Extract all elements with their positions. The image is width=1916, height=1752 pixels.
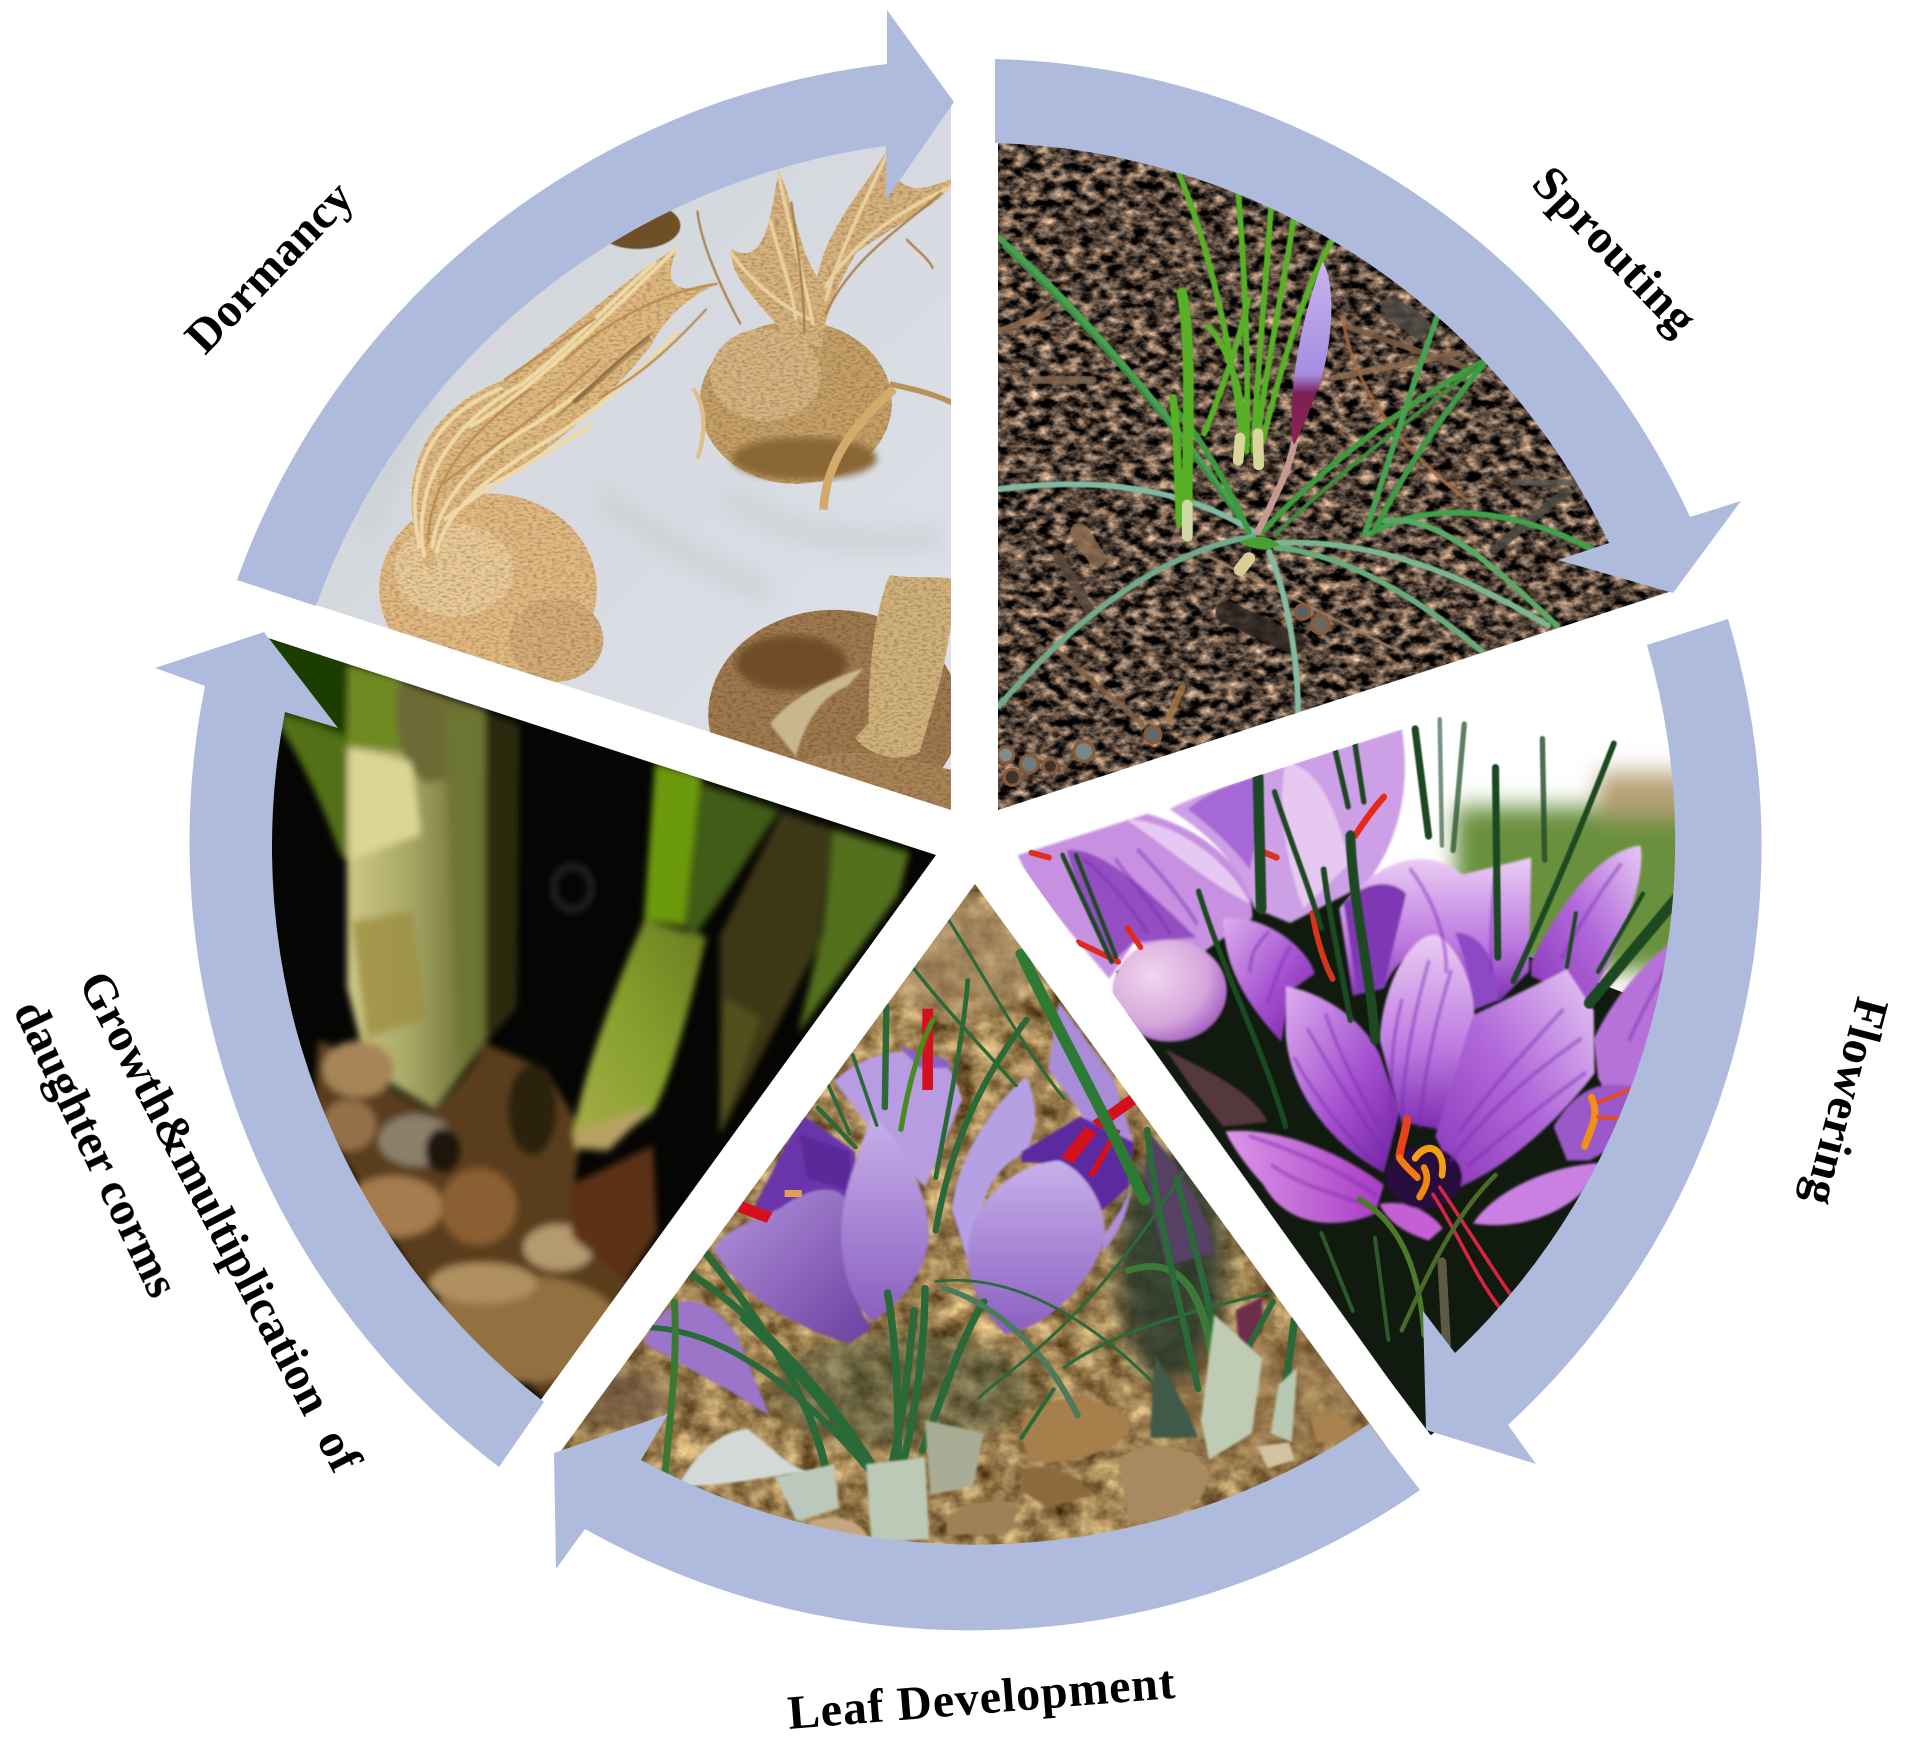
corm: upper right with tuft <box>693 151 952 510</box>
faint watermark ring <box>554 866 591 909</box>
sheaths at leaf bases <box>1187 434 1259 570</box>
arrow: flowering <box>1423 619 1762 1464</box>
label: Flowering: Flowering <box>1794 992 1899 1211</box>
arrow: sprouting <box>995 59 1741 593</box>
upper green leaves of second stem <box>644 763 702 926</box>
back flowers <box>644 1002 1262 1416</box>
label: Leaf Development: Leaf Development <box>786 1656 1177 1740</box>
corm: lower left with long roots <box>379 247 717 684</box>
leaves: long arching <box>998 237 1593 713</box>
green leaves <box>652 921 1295 1486</box>
corm: dark top corm <box>610 210 682 250</box>
panel: flowering photo <box>1017 716 1676 1436</box>
blurred field background <box>1455 773 1705 971</box>
label: Growth and multiplication of daughter corms: daughter corms <box>3 992 190 1305</box>
stamens and stigma <box>1031 797 1634 1311</box>
arrow: dormancy <box>237 10 954 606</box>
stem: second angled stem <box>572 921 706 1151</box>
white leaf sheaths <box>679 1315 1297 1543</box>
soil clods <box>807 1398 1354 1539</box>
panel: leaf development photo <box>540 880 1400 1560</box>
right flower <box>952 1077 1134 1334</box>
mulch detail chips <box>999 309 1579 724</box>
brown base of second stem <box>568 1146 657 1283</box>
dark foliage behind flowers <box>1116 890 1624 1436</box>
arrow: growth and multiplication <box>155 632 544 1467</box>
stem: left thick stem <box>347 663 485 1110</box>
red stigmas <box>740 1009 1134 1218</box>
upper-left leaf <box>260 630 347 742</box>
label: Dormancy: Dormancy <box>175 171 364 364</box>
icon: crocus bud <box>1258 262 1331 532</box>
label: Growth and multiplication of daughter corms: Growth&multiplication of <box>68 963 372 1481</box>
right background stems <box>720 811 834 1135</box>
cloth wrinkles <box>612 502 933 592</box>
dark green leaves <box>1062 719 1676 1127</box>
corm mass <box>314 1041 631 1401</box>
label: Sprouting: Sprouting <box>1522 156 1707 345</box>
main flower <box>1225 935 1603 1240</box>
corm: lower right brown <box>708 575 960 819</box>
left flower <box>713 1114 929 1343</box>
background flowers <box>1018 729 1676 1160</box>
panel: growth and multiplication photo <box>220 620 950 1420</box>
arrow: leaf development <box>554 1414 1420 1630</box>
hollow stems at lower left <box>998 605 1329 785</box>
narrow dark stem <box>485 712 520 1043</box>
panel: dormancy photo of corms <box>316 106 951 810</box>
soil tone patches <box>550 901 1370 1460</box>
lower stems <box>1321 1175 1496 1345</box>
panel: sprouting photo on mulch <box>998 143 1670 810</box>
orange anthers <box>785 1185 802 1201</box>
plant crown <box>1240 537 1280 549</box>
petal stripes <box>1085 850 1670 1204</box>
leaves: upright clumps <box>1173 170 1334 532</box>
